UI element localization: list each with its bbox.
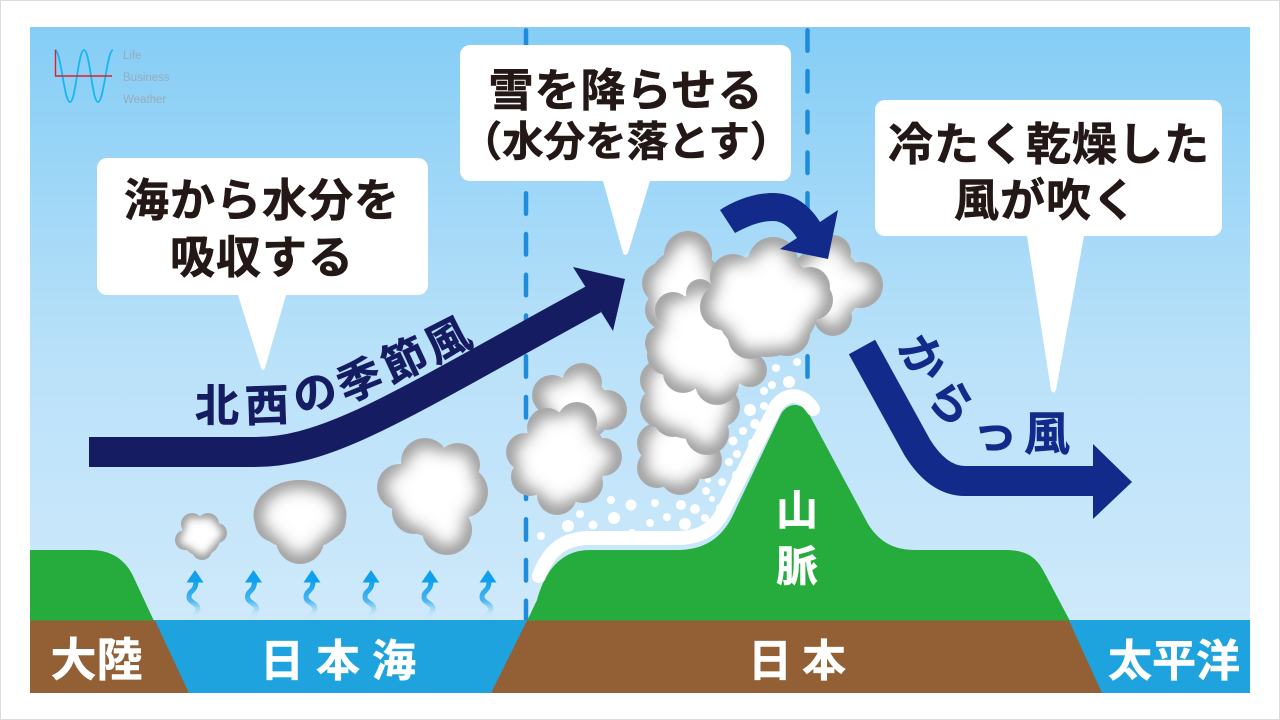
label: continent: 大陸	[50, 634, 142, 686]
callout: cold dry wind: 冷たく乾燥した	[888, 119, 1210, 170]
logo: Life Business Weather	[55, 50, 170, 106]
snow line on mountain	[539, 396, 813, 576]
snow falling dots	[537, 358, 801, 540]
cloud 10 back right	[787, 235, 883, 336]
callout: absorbing moisture: 吸収する	[170, 232, 354, 283]
arrow: northwest seasonal wind	[89, 267, 625, 452]
cloud 1 small	[175, 513, 227, 560]
label: Japan: 日本	[748, 637, 856, 686]
logo: Life Business Weather: Weather	[123, 94, 166, 106]
dashed boundary lines	[526, 30, 808, 625]
cloud 9 upper left	[642, 231, 722, 330]
cloud 3	[377, 438, 488, 555]
cloud 8 stack upper	[645, 279, 767, 405]
arrow: dry wind	[862, 347, 1132, 519]
label: mountains: 山	[776, 487, 818, 534]
label: からっ風: からっ風	[888, 325, 1070, 463]
label: mountains: 脈	[776, 543, 818, 590]
callout: making snow fall: 雪を降らせる	[488, 65, 764, 116]
label: 北西の季節風: 北西の季節風	[195, 309, 479, 432]
curved arrow over mountain	[720, 193, 838, 259]
callout: making snow fall	[460, 45, 791, 255]
callout: absorbing moisture: 海から水分を	[124, 175, 400, 226]
logo: Life Business Weather: Business	[123, 72, 170, 84]
cloud 2	[254, 480, 346, 564]
cloud 7 stack middle	[640, 351, 740, 455]
cloud 6 stack bottom	[637, 406, 722, 495]
sky background	[30, 27, 1250, 621]
callout: absorbing moisture	[97, 158, 428, 370]
label: Pacific Ocean: 太平洋	[1108, 637, 1240, 686]
cloud 5 front	[506, 402, 622, 515]
cloud 11 top front	[700, 237, 833, 359]
callout: cold dry wind: 風が吹く	[954, 175, 1138, 226]
label: mountains	[776, 487, 818, 590]
logo: Life Business Weather: Life	[123, 50, 142, 62]
sea	[30, 620, 1250, 693]
callout: cold dry wind	[875, 100, 1222, 392]
label: Sea of Japan: 日本海	[260, 637, 428, 686]
callout: making snow fall: （水分を落とす）	[461, 118, 791, 165]
evaporation arrows	[186, 570, 496, 619]
japan land and mountain	[491, 405, 1102, 693]
cloud 4 back	[532, 363, 627, 443]
continent land	[30, 550, 189, 693]
